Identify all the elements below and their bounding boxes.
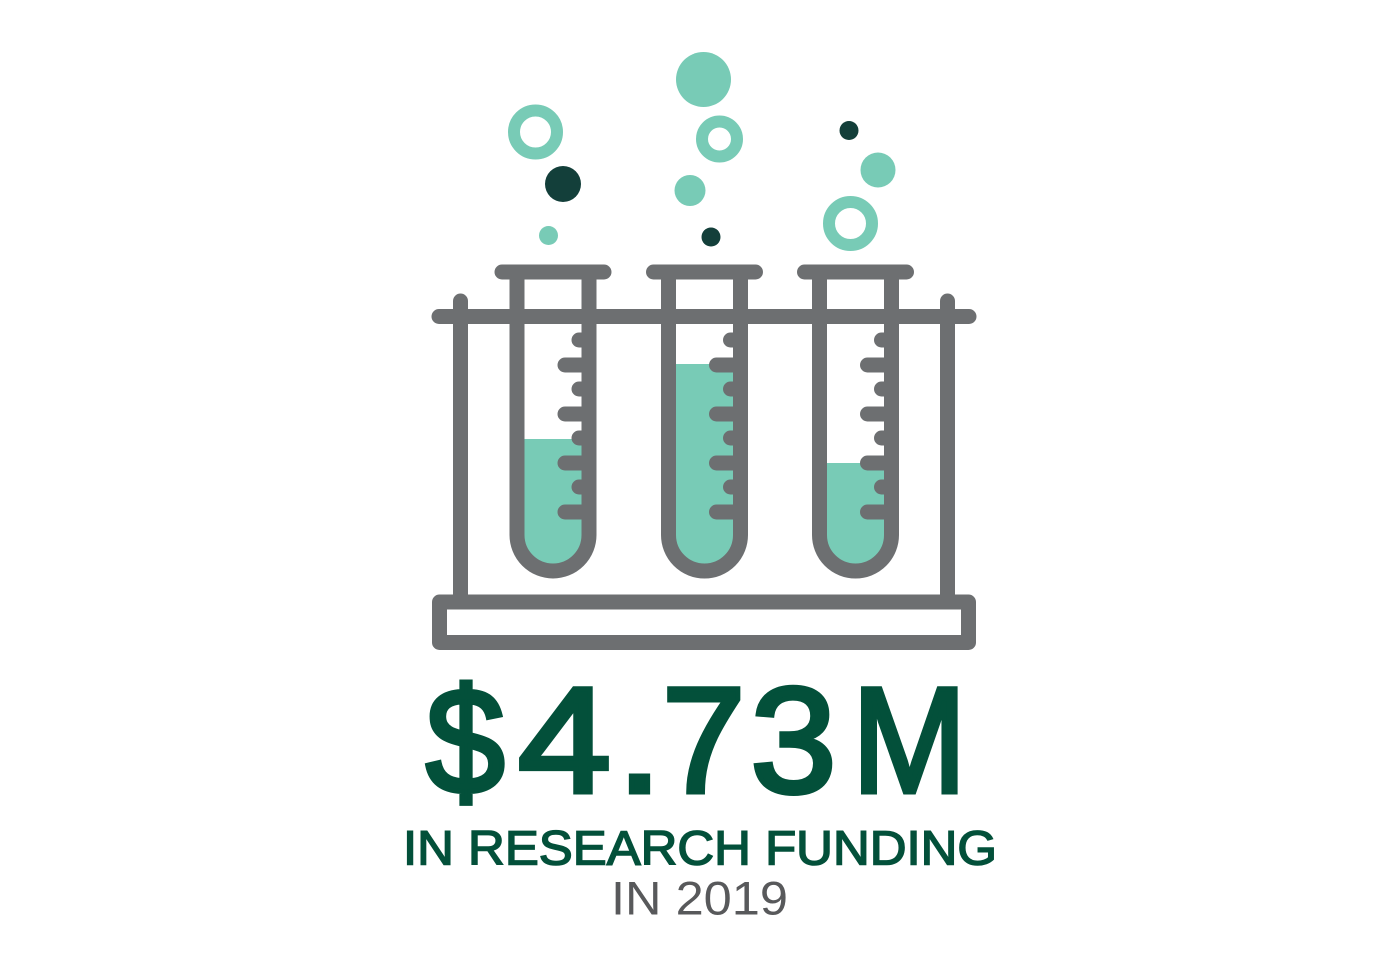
amount: M — [852, 656, 967, 824]
rack frame — [439, 301, 969, 642]
test tube 2 — [654, 272, 756, 571]
amount — [426, 656, 967, 825]
bubble: tube 2 ring — [702, 122, 737, 156]
amount: 7 — [662, 656, 745, 824]
bubble: tube 1 dark — [545, 166, 581, 202]
year: IN 2019 — [611, 872, 788, 924]
bubble: tube 2 dark — [702, 228, 720, 246]
test tube 1 — [502, 272, 604, 571]
subtitle: IN RESEARCH FUNDING — [403, 822, 997, 876]
bubbles — [514, 52, 896, 246]
bubble: tube 3 medium — [860, 152, 896, 188]
bubble: tube 3 ring — [829, 202, 872, 245]
bubble: tube 1 ring — [514, 110, 557, 154]
liquid: tube 3 — [826, 463, 884, 564]
amount: $ — [426, 657, 505, 825]
bubble: tube 2 medium — [674, 175, 706, 206]
amount: . — [616, 656, 662, 824]
amount: 3 — [750, 656, 836, 824]
liquid: tube 1 — [524, 439, 582, 564]
amount: 4 — [518, 656, 611, 824]
bubble: tube 3 dark — [840, 121, 858, 140]
liquid: tube 2 — [676, 364, 734, 564]
bubble: tube 1 small — [539, 226, 558, 245]
test tube rack — [439, 272, 969, 642]
bubble: tube 2 large — [676, 52, 731, 107]
test tube 3 — [804, 272, 906, 571]
